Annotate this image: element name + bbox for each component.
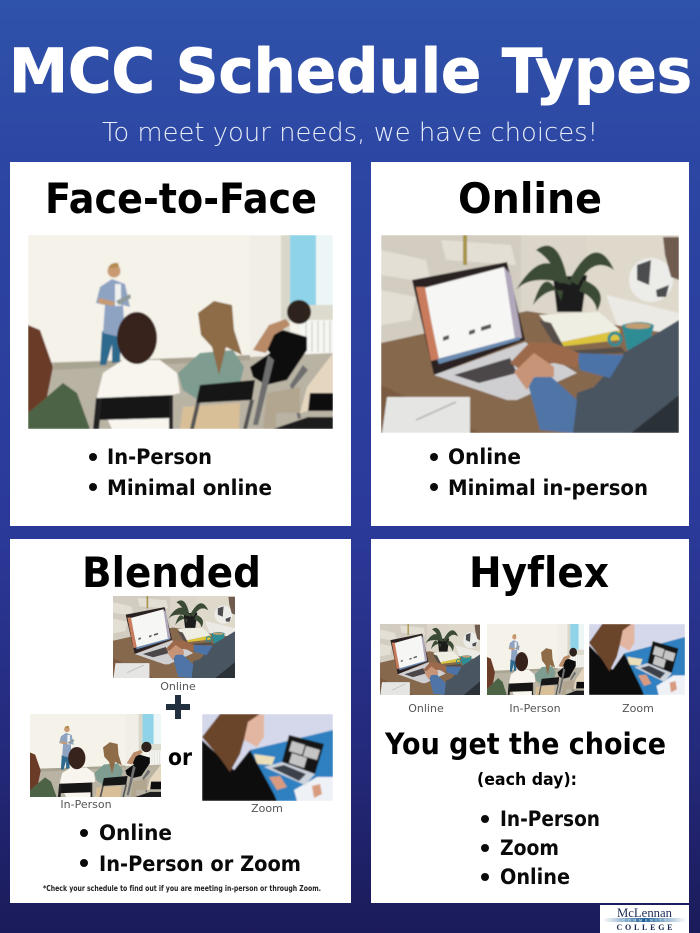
bullet list: In-Person [107, 445, 212, 469]
heading: Hyflex: Hyflex [469, 548, 609, 597]
caption: Zoom: Zoom [622, 702, 654, 715]
bullet list: Minimal online [107, 476, 272, 500]
heading: You get the choice: You get the choice [384, 727, 666, 761]
bullet list [89, 445, 272, 500]
bullet list: In-Person [500, 807, 600, 831]
heading: Online: Online [458, 174, 602, 223]
photo: online option [380, 624, 480, 695]
panel: Blended [10, 539, 351, 903]
panel: Hyflex [371, 539, 689, 903]
photo: online option [113, 596, 235, 678]
heading: Blended: Blended [82, 548, 261, 597]
bullet list [481, 807, 600, 889]
logo: McLennan Community College [600, 905, 689, 933]
label: or: or [168, 745, 193, 771]
bullet list: Online [448, 445, 521, 469]
logo: McLennan Community College: COMMUNITY [622, 918, 667, 922]
footnote: *Check your schedule to find out if you are meeting in-person or through Zoom. [43, 884, 321, 893]
bullet list: Minimal in-person [448, 476, 648, 500]
logo: McLennan Community College: COLLEGE [616, 923, 672, 932]
caption: Zoom: Zoom [251, 802, 283, 815]
bullet list [80, 821, 301, 876]
photo: zoom option [202, 714, 333, 801]
panel: Online [371, 162, 689, 526]
panel: Face-to-Face [10, 162, 351, 526]
caption: In-Person: In-Person [60, 798, 112, 811]
photo: zoom option [589, 624, 685, 695]
icon: plus sign [166, 695, 190, 719]
caption: Online: Online [408, 702, 444, 715]
subheading: each day: (each day): [477, 770, 577, 790]
photo: in-person option [30, 714, 161, 797]
bullet list: Zoom [500, 836, 559, 860]
title: MCC Schedule Types [9, 36, 692, 107]
logo: McLennan Community College: McLennan [617, 905, 672, 920]
caption: In-Person: In-Person [509, 702, 561, 715]
bullet list: Online [99, 821, 172, 845]
photo: classroom presentation [28, 235, 333, 429]
bullet list: Online [500, 865, 570, 889]
bullet list: In-Person or Zoom [99, 852, 301, 876]
heading: Face-to-Face: Face-to-Face [45, 174, 317, 223]
photo: laptop on desk [381, 235, 679, 433]
subtitle: To meet your needs, we have choices! [102, 118, 598, 148]
photo: in-person option [487, 624, 584, 695]
bullet list [430, 445, 648, 500]
caption: Online: Online [160, 680, 196, 693]
